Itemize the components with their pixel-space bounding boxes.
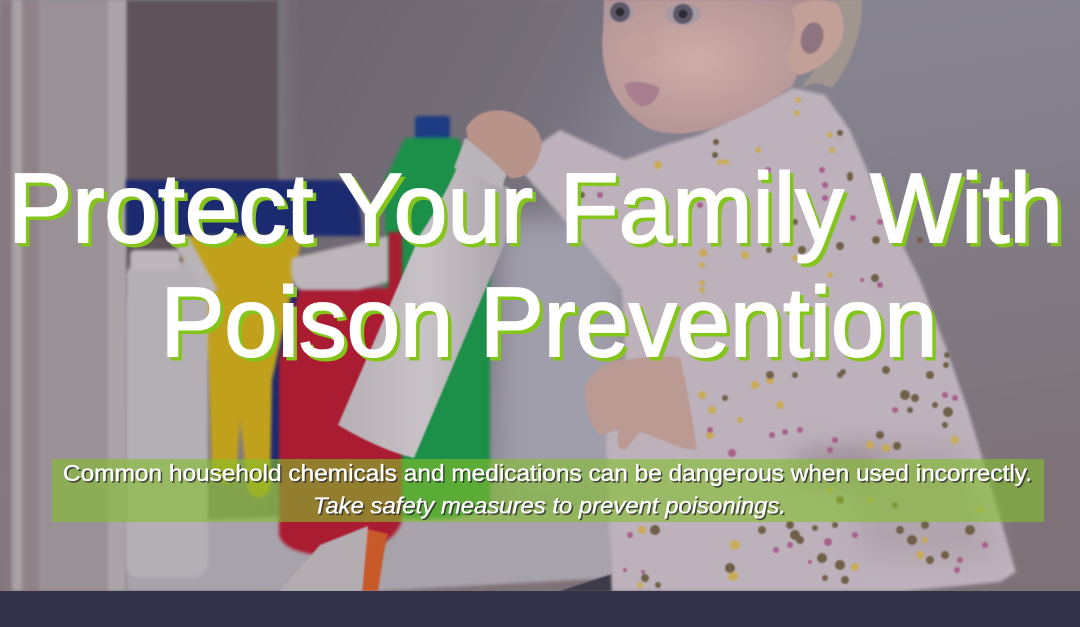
subtitle text [63, 460, 1034, 520]
blue tub [126, 180, 362, 236]
cabinet interior [126, 0, 278, 300]
child's hands [466, 110, 697, 450]
shelf [126, 505, 612, 591]
door frame [0, 0, 126, 591]
shelf edge shadow [560, 574, 612, 591]
subtitle lines [63, 460, 1032, 518]
subtitle lines: Take safety measures to prevent poisonings. [313, 492, 786, 518]
blue bottle [268, 290, 318, 480]
footer band [0, 591, 1080, 627]
child's face [602, 0, 844, 134]
spray head [291, 236, 388, 290]
green bottle [385, 116, 490, 519]
white bottle held by child [338, 138, 512, 458]
red bottle [279, 232, 402, 556]
subtitle lines: Common household chemicals and medications can be dangerous when used incorrectly. [63, 460, 1032, 486]
title text: Protect Your Family With [8, 153, 1063, 263]
child's hair [800, 0, 862, 90]
subtitle shadow [64, 462, 1034, 520]
subtitle banner [52, 459, 1044, 522]
title shadow: Poison Prevention [164, 270, 941, 380]
nose [618, 34, 658, 62]
title [8, 153, 1066, 380]
foreground spray bottle [280, 526, 388, 591]
ear [788, 0, 844, 75]
subtitle shadow: Take safety measures to prevent poisonings. [314, 494, 788, 520]
title shadow [12, 156, 1066, 380]
white bottle left [126, 236, 218, 578]
title text [8, 153, 1063, 377]
eyes [605, 2, 635, 22]
subtitle shadow: Common household chemicals and medications can be dangerous when used incorrectly. [64, 462, 1034, 488]
child's dress [525, 88, 1016, 591]
dress floral print [573, 97, 988, 588]
yellow gloves [178, 236, 302, 498]
title shadow: Protect Your Family With [12, 156, 1066, 266]
dress shading [790, 440, 1000, 560]
ear inner [797, 20, 827, 56]
title text: Poison Prevention [160, 267, 938, 377]
cabinet back wall [278, 0, 628, 530]
mouth [624, 82, 660, 106]
